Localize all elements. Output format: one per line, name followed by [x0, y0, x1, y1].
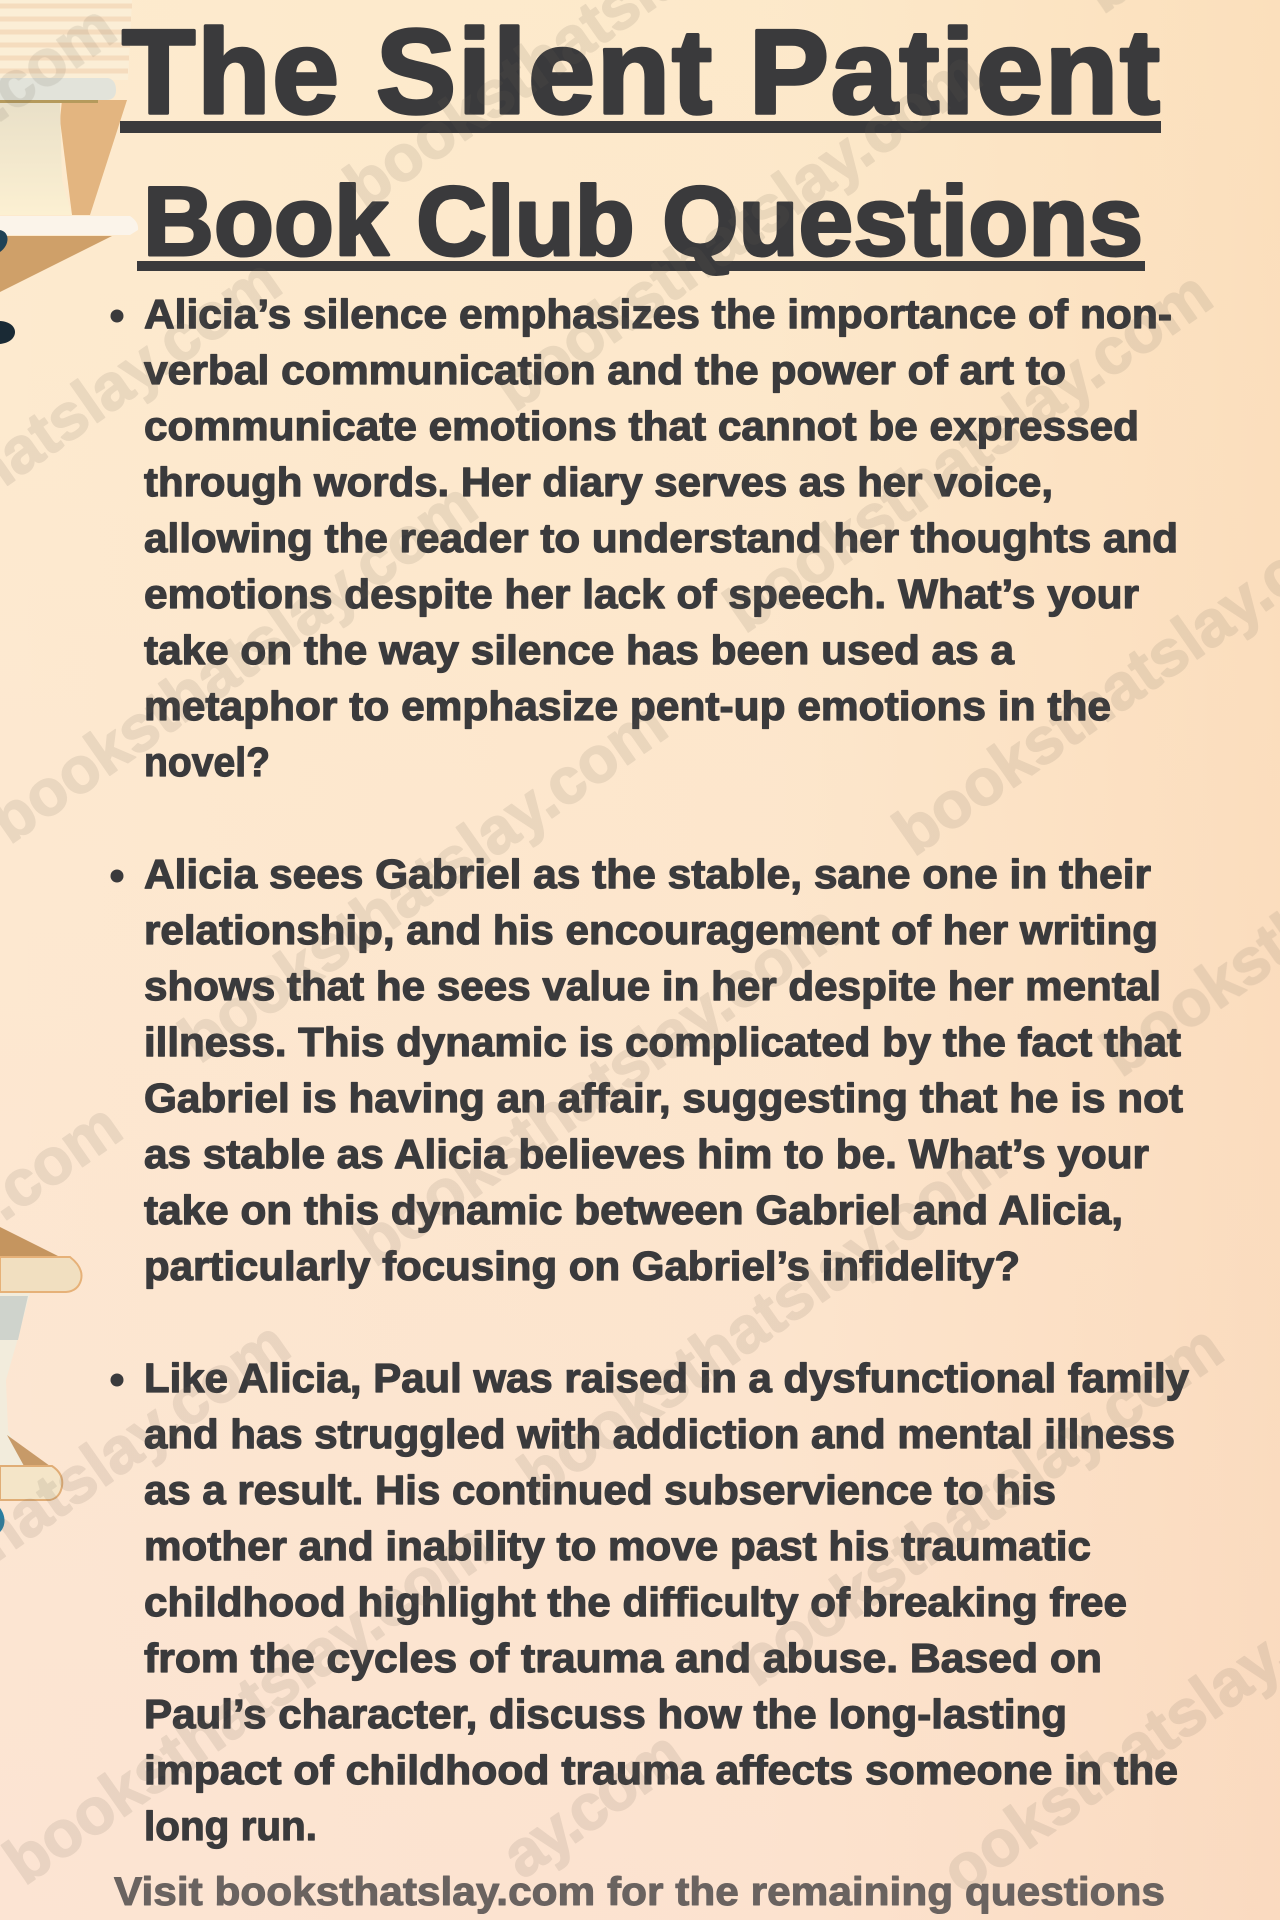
bullet: [110, 870, 124, 882]
title line 2: Book Club Questions: [143, 166, 1143, 276]
question 1 text: novel?: [144, 739, 270, 785]
question 1 text: emotions despite her lack of speech. What’s your: [144, 571, 1139, 617]
question 1 text: verbal communication and the power of art to: [144, 347, 1066, 393]
question 2 text: as stable as Alicia believes him to be. What’s your: [144, 1131, 1149, 1177]
watermarks: booksthatslay.com: [711, 256, 1224, 646]
bullet: [110, 1374, 124, 1386]
question 3 text: Paul’s character, discuss how the long-lasting: [144, 1691, 1067, 1737]
watermarks: booksthatslay.com: [505, 1122, 1019, 1512]
question 3: [110, 1355, 1200, 1849]
question 3 text: impact of childhood trauma affects someone in the: [144, 1747, 1178, 1793]
watermarks: booksthatslay.com: [0, 1508, 504, 1898]
watermarks: booksthatslay.com: [722, 1309, 1235, 1700]
question 3 text: childhood highlight the difficulty of breaking free: [144, 1579, 1127, 1625]
question 2 text: particularly focusing on Gabriel’s infidelity?: [144, 1243, 1020, 1289]
title underline 2: [137, 261, 1145, 271]
question 3 text: mother and inability to move past his traumatic: [144, 1523, 1091, 1569]
question 1 text: metaphor to emphasize pent-up emotions in the: [144, 683, 1111, 729]
watermarks: booksthatslay.com: [166, 686, 679, 1076]
question 1 text: communicate emotions that cannot be expressed: [144, 403, 1139, 449]
question 2 text: relationship, and his encouragement of her writing: [144, 907, 1158, 953]
question 3 text: from the cycles of trauma and abuse. Based on: [144, 1635, 1102, 1681]
question 1 text: Alicia’s silence emphasizes the importance of non-: [144, 291, 1172, 337]
question 1 text: allowing the reader to understand her thoughts and: [144, 515, 1178, 561]
illustration: stacked books top-left: [0, 0, 138, 344]
title underline 1: [120, 121, 1161, 133]
question 1 text: take on the way silence has been used as a: [144, 627, 1015, 673]
bullet: [110, 310, 124, 322]
illustration: stacked books lower-left: [0, 1227, 82, 1532]
question 2 text: shows that he sees value in her despite her mental: [144, 963, 1161, 1009]
footer call to action: Visit booksthatslay.com for the remaining questions: [114, 1870, 1165, 1914]
question 1 text: through words. Her diary serves as her voice,: [144, 459, 1053, 505]
question 2: [110, 851, 1194, 1289]
question 1: [110, 291, 1189, 785]
watermarks: booksthatslay.com: [341, 889, 855, 1279]
question 2 text: Alicia sees Gabriel as the stable, sane one in their: [144, 851, 1151, 897]
question 2 text: take on this dynamic between Gabriel and Alicia,: [144, 1187, 1123, 1233]
question 2 text: illness. This dynamic is complicated by the fact that: [144, 1019, 1181, 1065]
question 3 text: long run.: [144, 1803, 317, 1849]
watermarks: ay.com: [488, 1715, 696, 1892]
watermarks: booksthatslay.com: [481, 34, 994, 424]
question 3 text: and has struggled with addiction and mental illness: [144, 1411, 1175, 1457]
title line 1: The Silent Patient: [122, 5, 1160, 139]
question 2 text: Gabriel is having an affair, suggesting that he is not: [144, 1075, 1183, 1121]
title: [120, 5, 1161, 276]
question 3 text: Like Alicia, Paul was raised in a dysfunctional family: [144, 1355, 1189, 1401]
question 3 text: as a result. His continued subservience to his: [144, 1467, 1056, 1513]
